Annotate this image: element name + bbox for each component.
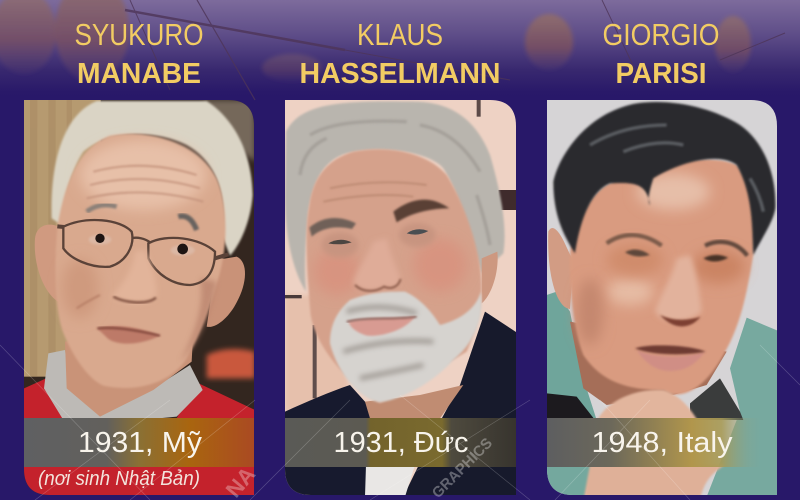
caption band: Manabe [24, 418, 254, 467]
watermark [0, 345, 800, 500]
hand [597, 390, 697, 420]
shirt [547, 292, 597, 420]
backdrop [24, 100, 101, 377]
jacket [285, 385, 370, 495]
panel: portrait Manabe [24, 100, 257, 497]
panel: portrait Parisi [544, 98, 782, 498]
eyebrows [87, 205, 117, 212]
collar [44, 350, 203, 422]
glasses [57, 220, 228, 285]
eye sockets [607, 244, 663, 276]
ear [482, 252, 498, 303]
caption band: Parisi [547, 418, 760, 467]
eyebrows [309, 218, 356, 237]
skin highlights and shade [80, 140, 207, 210]
caption band: Parisi: 1948, Italy [592, 427, 733, 459]
caption band: Hasselmann [285, 418, 516, 467]
sweater [24, 377, 255, 497]
face [570, 160, 755, 394]
hair [553, 102, 775, 255]
backdrop [285, 295, 348, 412]
birthplace note: (nơi sinh Nhật Bản) [38, 468, 200, 490]
nose [655, 255, 702, 322]
ears [34, 224, 58, 300]
beard [330, 292, 481, 402]
mouth [97, 326, 160, 344]
ear [548, 228, 573, 309]
eyes [625, 250, 650, 256]
caption band: Manabe: 1931, Mỹ [78, 427, 203, 459]
nose [354, 240, 398, 289]
heading: Klaus Hasselmann: HASSELMANN [300, 58, 500, 90]
face [55, 134, 226, 388]
hair [285, 101, 505, 292]
eyes [89, 235, 111, 245]
brows [607, 235, 662, 246]
heading: Syukuro Manabe: SYUKURO [74, 17, 204, 52]
heading: Giorgio Parisi [602, 17, 720, 90]
face [306, 149, 481, 403]
heading: Klaus Hasselmann [300, 17, 500, 90]
watermark: GRAPHICS [429, 435, 496, 500]
neck [65, 342, 192, 416]
caption band: Hasselmann: 1931, Đức [334, 427, 468, 459]
decorative header ornaments [0, 0, 785, 100]
heading: Giorgio Parisi: PARISI [616, 58, 706, 90]
panel: portrait Hasselmann [284, 100, 522, 497]
hair [52, 101, 253, 256]
heading: Syukuro Manabe [74, 17, 204, 90]
mouth [640, 352, 702, 370]
shirt and neck [365, 385, 464, 418]
eyes [322, 234, 357, 258]
heading: Syukuro Manabe: MANABE [77, 58, 201, 90]
mouth [348, 317, 415, 336]
nose [112, 250, 157, 303]
heading: Klaus Hasselmann: KLAUS [357, 17, 443, 52]
heading: Giorgio Parisi: GIORGIO [602, 17, 720, 52]
